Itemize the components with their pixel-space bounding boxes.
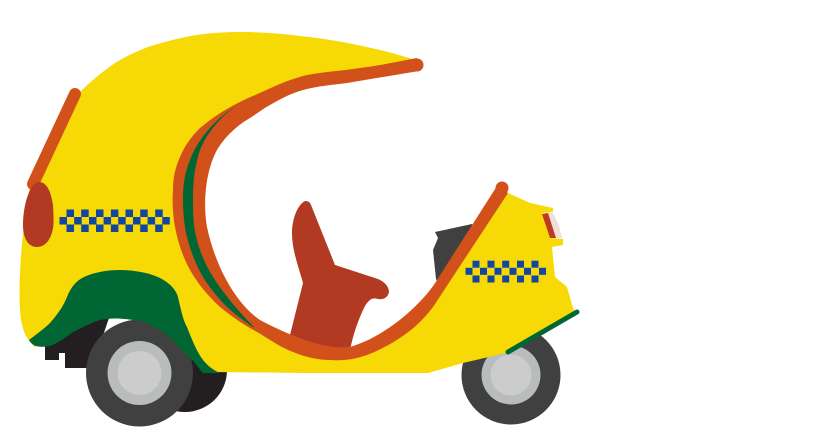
front wheel bbox=[462, 326, 560, 424]
yellow body shell bbox=[19, 32, 575, 373]
green rear fender bbox=[29, 270, 220, 373]
arch tip front roof bbox=[410, 58, 424, 72]
front dark seat back bbox=[433, 224, 480, 285]
green arch stripe bbox=[183, 105, 255, 328]
rear tail lamp bbox=[23, 182, 54, 247]
rear wheel bbox=[86, 320, 193, 426]
front checker band bbox=[466, 261, 546, 282]
headlamp bbox=[542, 213, 562, 238]
rear roof strut bbox=[33, 94, 75, 184]
rear checker band bbox=[60, 210, 170, 232]
rear shadow undercarriage bbox=[40, 315, 227, 412]
front fender green strip bbox=[508, 312, 577, 352]
driver seat bbox=[285, 201, 389, 350]
orange arch trim bbox=[173, 58, 508, 360]
arch tip front cowl bbox=[496, 182, 508, 194]
